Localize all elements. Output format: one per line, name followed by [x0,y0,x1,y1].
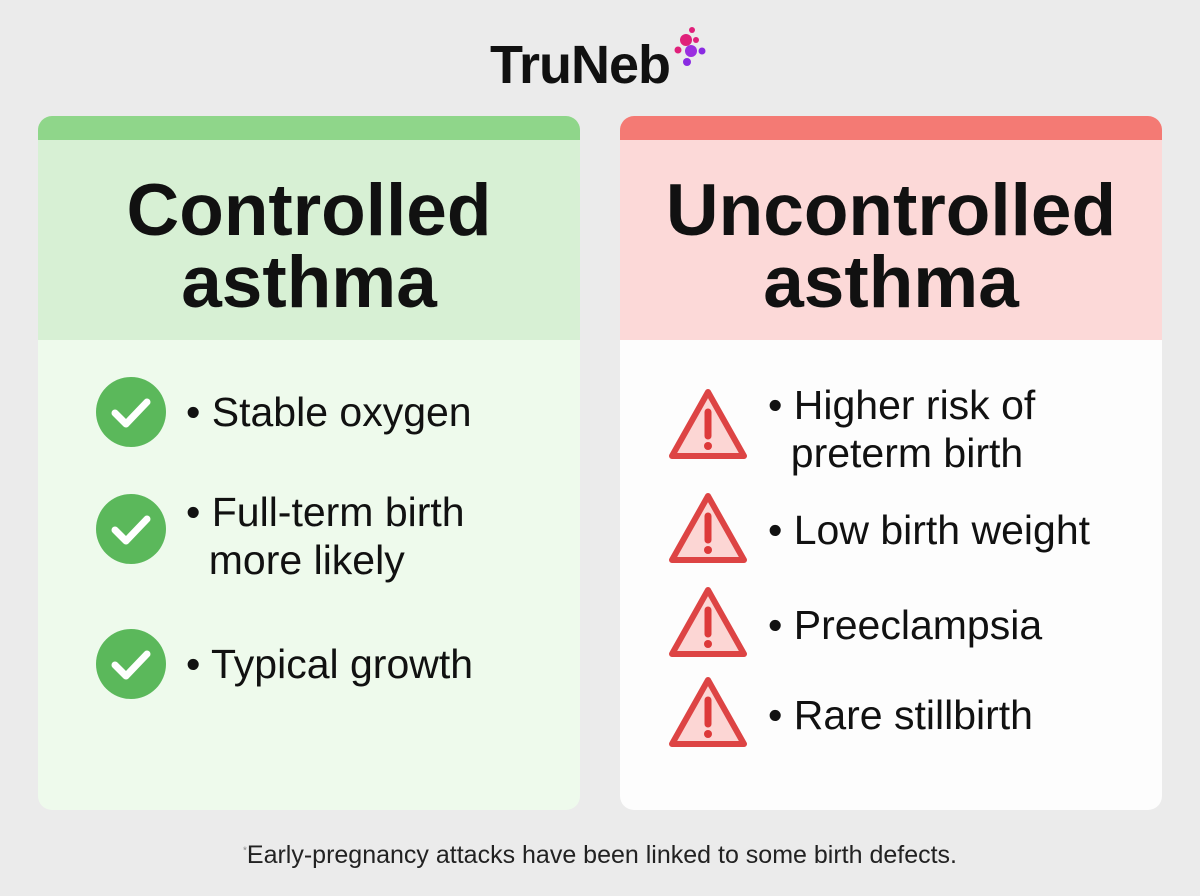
text: typical growth: • Typical growth [186,641,473,687]
text: full-term: more likely [209,537,405,583]
text: full-term [186,489,465,583]
heading: uncontrolled: Uncontrolled [666,170,1116,251]
icon: check [96,494,166,564]
text: preterm [768,382,1036,476]
text: preterm: • Higher risk of [768,382,1035,428]
panel: controlled asthma [38,116,580,810]
heading: controlled: asthma [181,242,437,323]
icon: warning [669,677,747,747]
icon: warning [669,493,747,563]
icon: warning [669,389,747,459]
list: controlled benefits [96,377,473,699]
list: risks [669,382,1090,747]
icon: logo dots [674,27,706,66]
heading: controlled [38,140,580,340]
icon: check [96,629,166,699]
footnote: *Early-pregnancy attacks have been linked to some birth defects. [243,841,957,869]
heading: controlled: Controlled [127,170,491,251]
text: stillbirth: • Rare stillbirth [768,692,1033,738]
panel: uncontrolled asthma [620,116,1162,810]
text: preterm: preterm birth [791,430,1023,476]
text: full-term: • Full-term birth [186,489,465,535]
logo: TruNeb [490,35,670,95]
heading: uncontrolled [620,140,1162,340]
icon: check [96,377,166,447]
icon: warning [669,587,747,657]
text: preeclampsia: • Preeclampsia [768,602,1042,648]
heading: uncontrolled: asthma [763,242,1019,323]
text: low birth weight: • Low birth weight [768,507,1090,553]
text: stable oxygen: • Stable oxygen [186,389,472,435]
